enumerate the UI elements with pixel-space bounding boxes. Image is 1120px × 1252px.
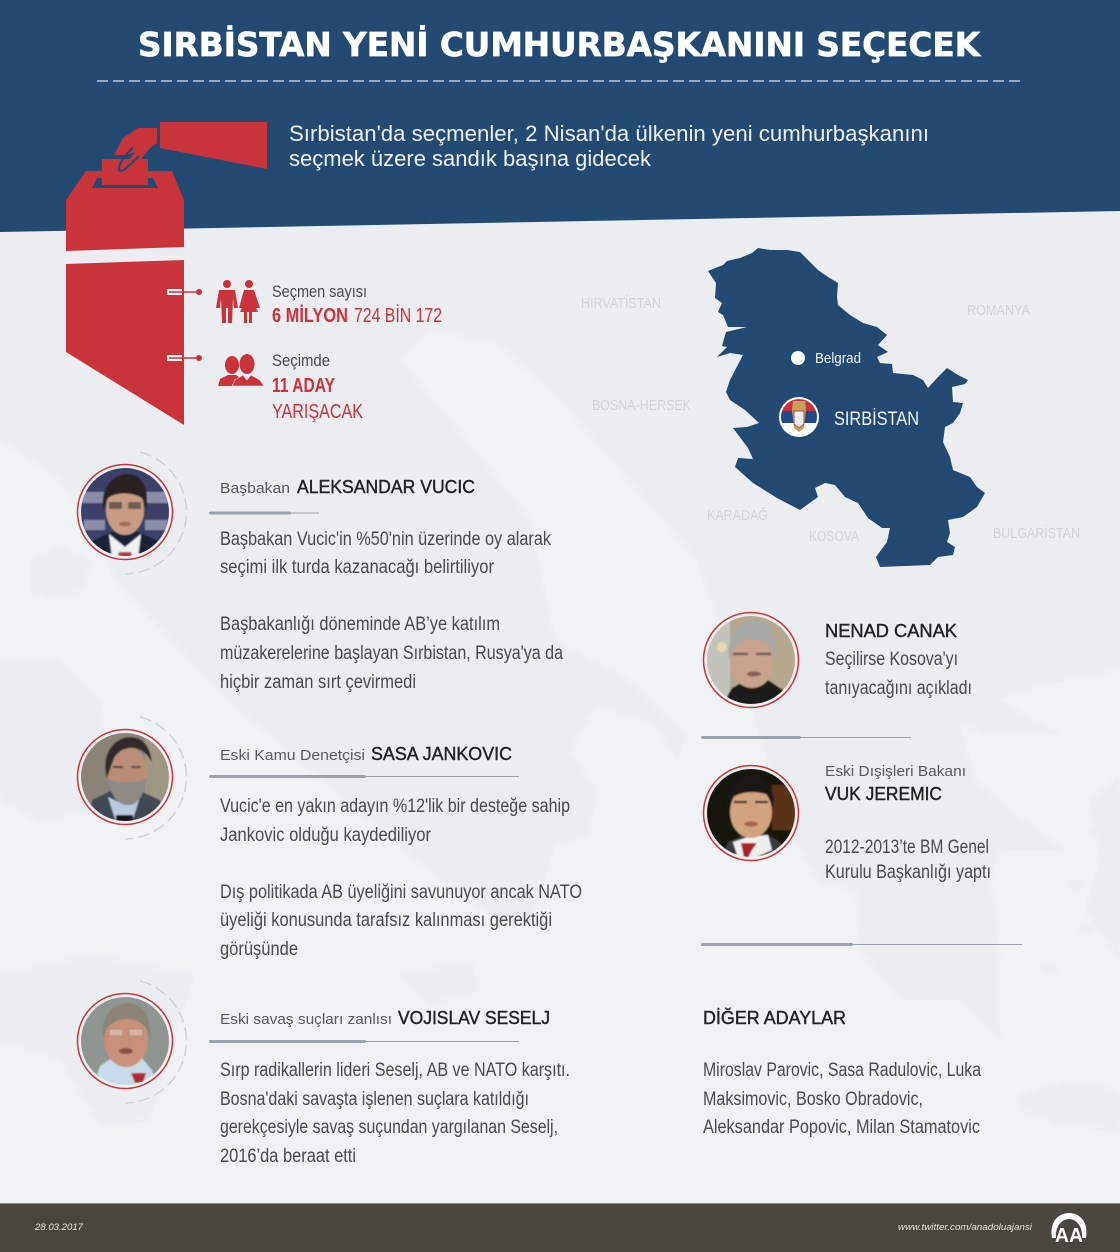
candidate: Vojislav Seselj — [78, 981, 570, 1167]
name: Jankovic — [220, 744, 512, 764]
text: Seselj: Bosna'daki savaşta işlenen suçlara katıldığı — [220, 1089, 529, 1110]
logo: AA: AA — [1055, 1225, 1083, 1247]
voter count text: 724 BİN 172 — [354, 304, 442, 327]
text: Vucic: hiçbir zaman sırt çevirmedi — [220, 672, 416, 693]
divider — [701, 943, 1022, 946]
capital marker — [791, 351, 805, 365]
intro text: seçmek üzere sandık başına gidecek — [289, 146, 652, 171]
text: Vucic: müzakerelerine başlayan Sırbistan, Rusya'ya da — [220, 643, 563, 664]
country labels: HIRVATİSTAN — [581, 294, 661, 312]
text: Jankovic: üyeliği konusunda tarafsız kalınması gerektiği — [220, 910, 552, 931]
text: Jeremic — [825, 763, 991, 883]
name: Vucic — [220, 477, 475, 497]
name: Vucic: Başbakan — [220, 480, 290, 497]
text: Seselj: gerekçesiyle savaş suçundan yargılanan Seselj, — [220, 1117, 558, 1138]
text: Jankovic: görüşünde — [220, 939, 298, 960]
other candidates: Miroslav Parovic, Sasa Radulovic, Luka — [703, 1060, 981, 1081]
country labels: BOSNA-HERSEK — [592, 397, 691, 414]
country labels: ROMANYA — [967, 302, 1030, 319]
name: Jankovic: SASA JANKOVIC — [371, 744, 512, 764]
candidate count text: Seçimde — [272, 351, 330, 370]
title divider — [97, 80, 1025, 82]
header band — [0, 0, 1120, 232]
footer — [0, 1203, 1120, 1252]
icon: voters — [216, 280, 260, 323]
portrait: Vucic — [78, 452, 186, 574]
candidate count text: 11 ADAY — [272, 375, 336, 397]
divider — [209, 1040, 519, 1043]
country labels: KOSOVA — [809, 528, 859, 545]
intro text — [289, 121, 929, 171]
text: Jankovic: Dış politikada AB üyeliğini savunuyor ancak NATO — [220, 882, 582, 903]
icon: candidates — [218, 354, 264, 386]
text: Jeremic: VUK JEREMIC — [825, 784, 942, 804]
candidate count text: YARIŞACAK — [272, 401, 364, 423]
icon: Serbian flag — [779, 397, 819, 437]
divider — [701, 736, 911, 739]
text: Canak — [825, 621, 972, 699]
text: Jeremic: Kurulu Başkanlığı yaptı — [825, 862, 991, 883]
voter count text: Seçmen sayısı — [272, 282, 367, 301]
text: Jankovic: Vucic'e en yakın adayın %12'lik bir desteğe sahip — [220, 796, 570, 817]
logo: AA — [1051, 1213, 1087, 1247]
other candidates: Aleksandar Popovic, Milan Stamatovic — [703, 1117, 980, 1138]
candidate: Nenad Canak — [701, 612, 972, 739]
text: Jankovic — [220, 796, 582, 960]
voter count text — [272, 282, 442, 327]
name: Vucic: ALEKSANDAR VUCIC — [297, 477, 475, 497]
text: Vucic: seçimi ilk turda kazanacağı belirtiliyor — [220, 557, 495, 578]
intro text: Sırbistan'da seçmenler, 2 Nisan'da ülkenin yeni cumhurbaşkanını — [289, 121, 929, 146]
country labels: KARADAĞ — [707, 507, 768, 524]
text: Seselj — [220, 1060, 570, 1167]
text: Canak: NENAD CANAK — [825, 621, 957, 641]
portrait: Seselj — [78, 981, 186, 1103]
voter count text: 6 MİLYON — [272, 304, 348, 327]
country labels — [581, 294, 1080, 545]
candidate: Vuk Jeremic — [701, 763, 1022, 946]
name: Seselj: VOJISLAV SESELJ — [398, 1008, 550, 1028]
website: www.twitter.com/anadoluajansi — [898, 1222, 1033, 1233]
divider — [209, 512, 319, 514]
portrait: Jeremic — [704, 766, 798, 860]
map of Serbia — [708, 248, 985, 567]
name: Seselj — [220, 1008, 550, 1028]
candidate count text — [272, 351, 364, 423]
text: Jankovic: Jankovic olduğu kaydediliyor — [220, 825, 432, 846]
title: SIRBİSTAN YENİ CUMHURBAŞKANINI SEÇECEK — [138, 24, 981, 64]
name: Jankovic: Eski Kamu Denetçisi — [220, 747, 365, 764]
date: 28.03.2017 — [34, 1222, 84, 1232]
portrait: Jankovic — [78, 717, 186, 839]
text: Seselj: Sırp radikallerin lideri Seselj, AB ve NATO karşıtı. — [220, 1060, 570, 1081]
other candidates: DİĞER ADAYLAR — [703, 1007, 846, 1028]
candidate: Aleksandar Vucic — [78, 452, 563, 693]
text: Vucic: Başbakanlığı döneminde AB’ye katılım — [220, 614, 500, 635]
text: Jeremic: Eski Dışişleri Bakanı — [825, 763, 966, 780]
text: Canak: Seçilirse Kosova'yı — [825, 649, 958, 670]
text: Jeremic: 2012-2013’te BM Genel — [825, 837, 989, 858]
text: Vucic — [220, 529, 563, 693]
text: Canak: tanıyacağını açıkladı — [825, 678, 972, 699]
name: Seselj: Eski savaş suçları zanlısı — [220, 1011, 392, 1028]
text: Seselj: 2016’da beraat etti — [220, 1146, 356, 1167]
divider — [209, 775, 519, 778]
country labels: BULGARİSTAN — [993, 524, 1080, 542]
other candidates: Maksimovic, Bosko Obradovic, — [703, 1089, 923, 1110]
portrait: Canak — [704, 612, 798, 708]
other candidates — [703, 1007, 981, 1138]
label: Belgrad: Belgrad — [815, 350, 861, 367]
label: Sırbistan: SIRBİSTAN — [834, 409, 919, 430]
text: Vucic: Başbakan Vucic'in %50'nin üzerinde oy alarak — [220, 529, 551, 550]
candidate: Sasa Jankovic — [78, 717, 582, 960]
icon: ballot box with hand — [66, 122, 267, 425]
